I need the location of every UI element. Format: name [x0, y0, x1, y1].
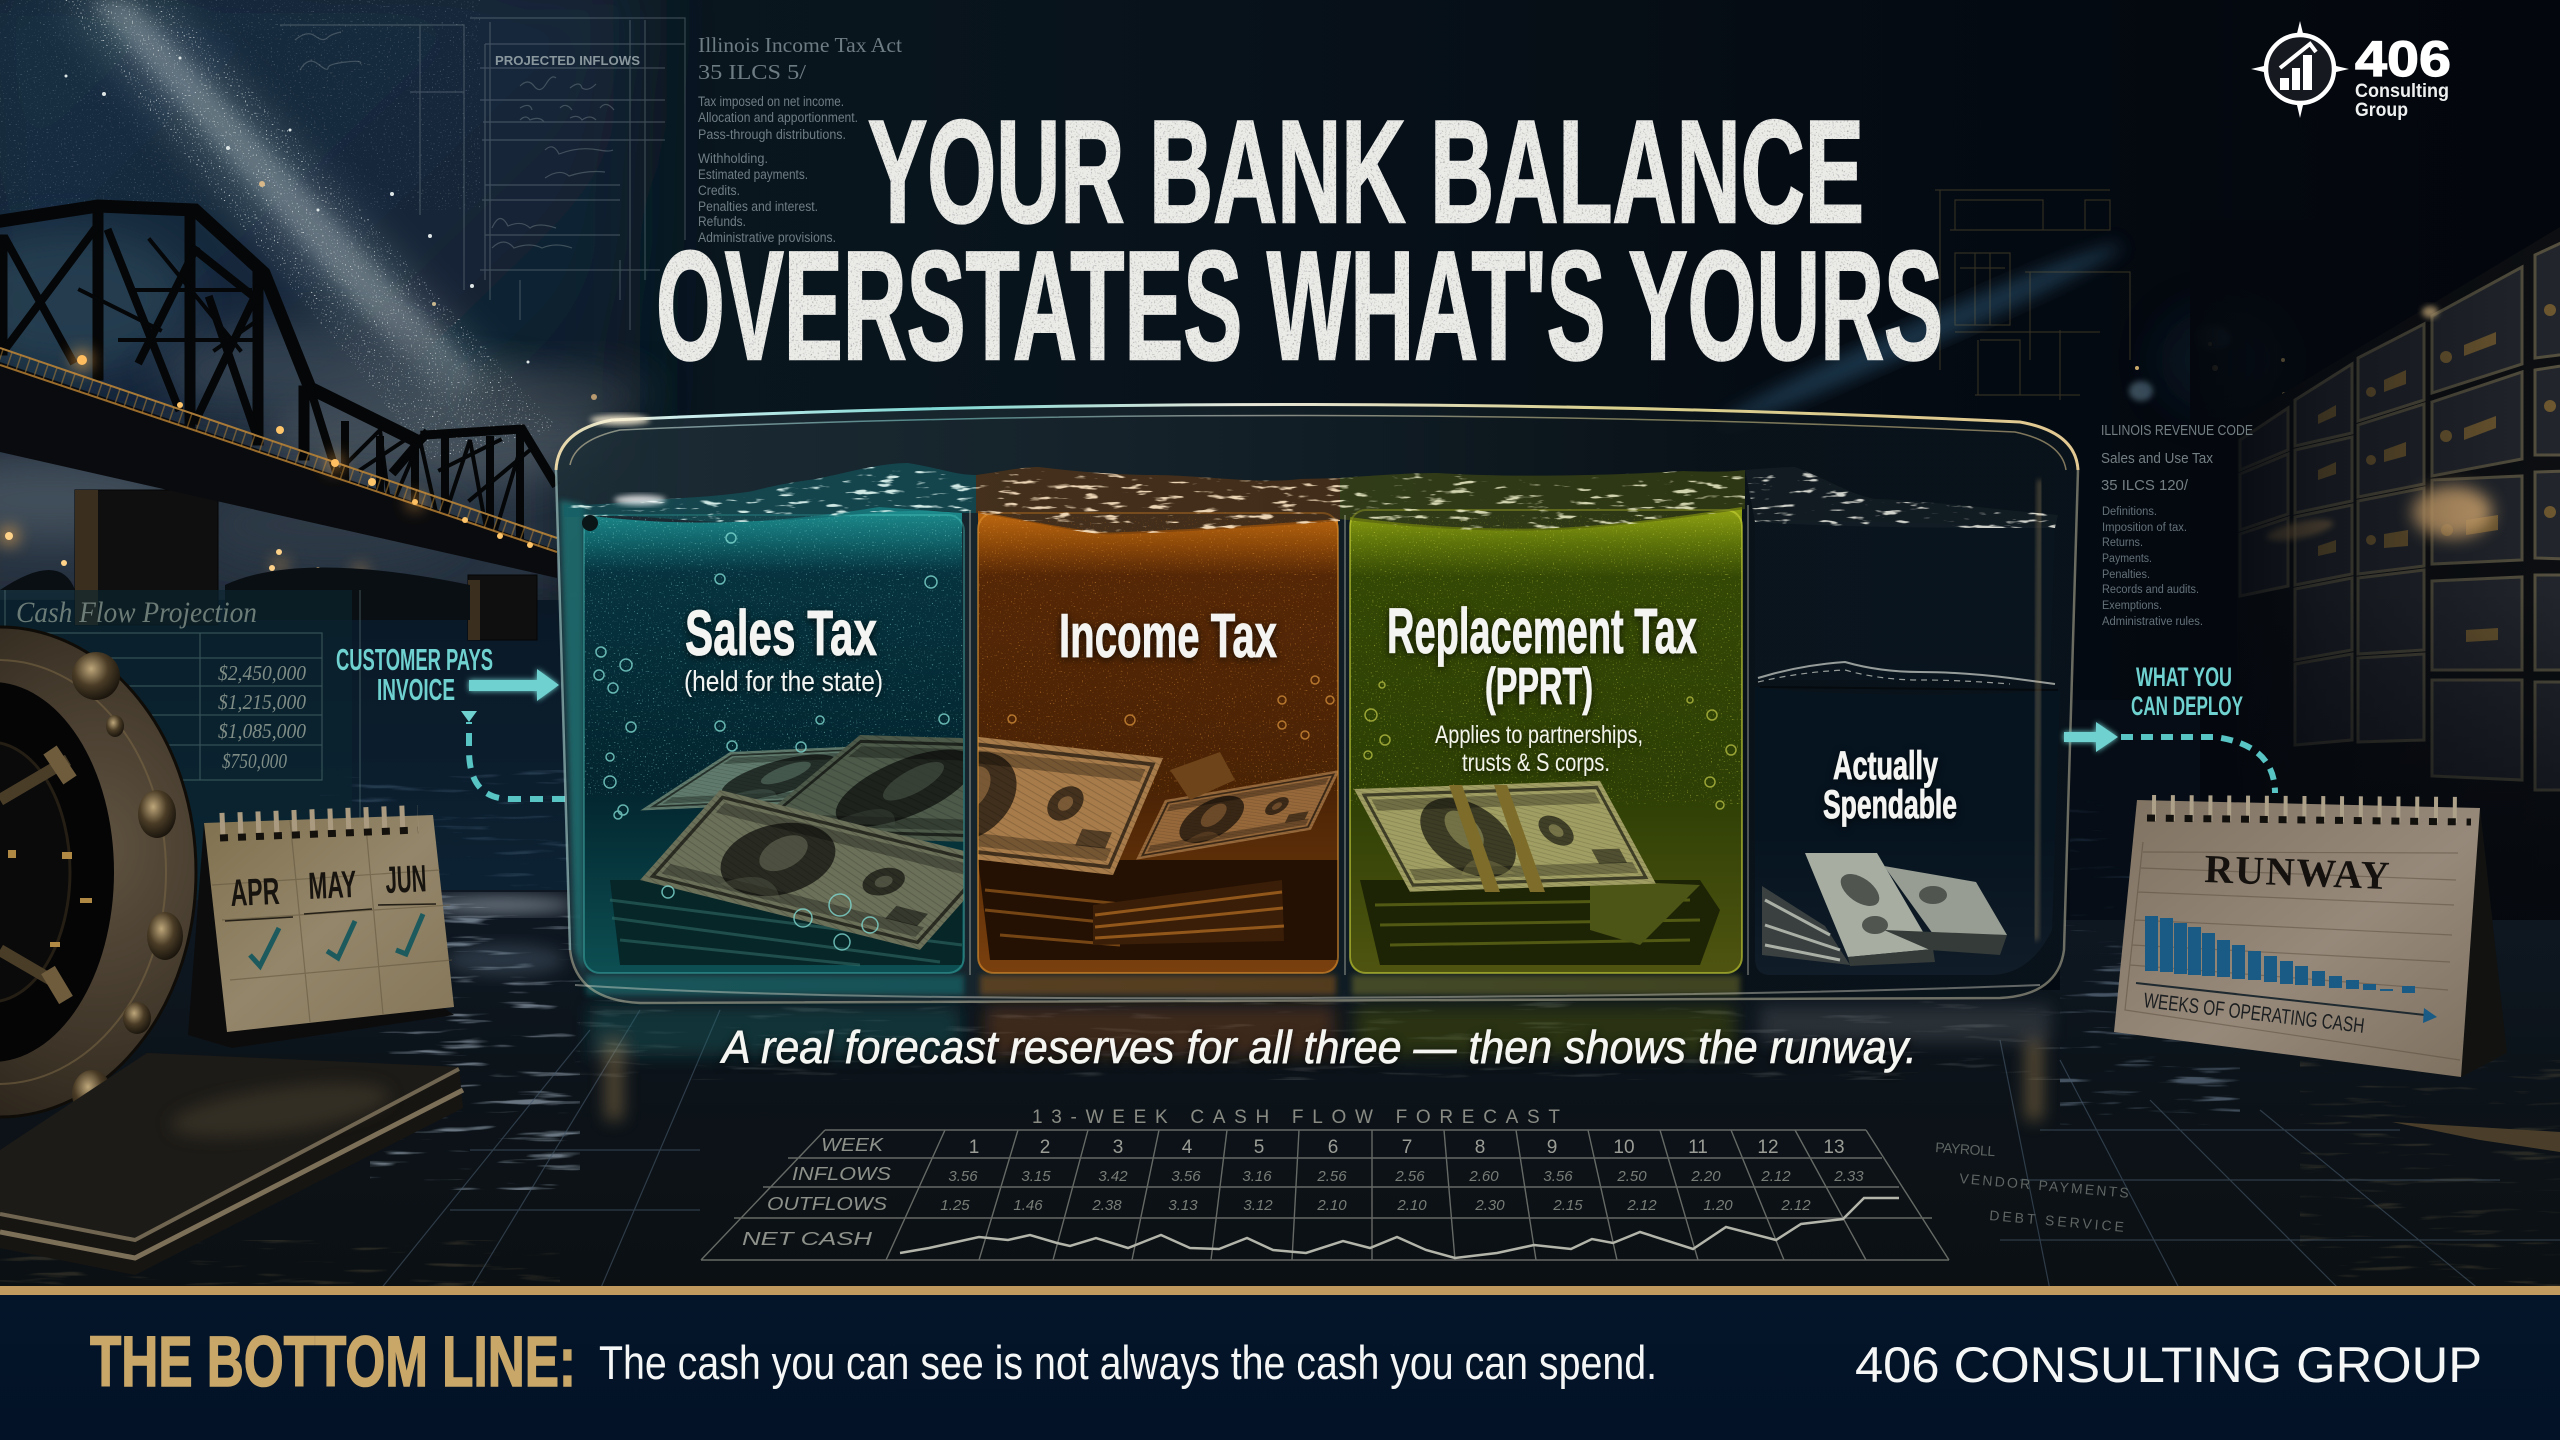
- label: sales tax: [684, 597, 883, 698]
- river water behind the desk: [0, 600, 2200, 930]
- callout: customer pays invoice: [336, 642, 565, 799]
- desk notes: payroll, vendor, debt: [1935, 1139, 2129, 1235]
- background document: Illinois Revenue Code: Sales and Use Tax: [2101, 451, 2214, 467]
- arrow: into tank: [469, 669, 559, 701]
- label: actually spendable: Actually: [1833, 744, 1939, 788]
- bar chart: weeks of cash: [2145, 916, 2415, 993]
- logo: 406 Consulting Group: 406: [2355, 31, 2451, 87]
- compartment: replacement tax water: [1350, 507, 1742, 973]
- cash: small silver stacks: [1762, 853, 2007, 966]
- forecast table etched on desk: 1.25: [940, 1197, 970, 1214]
- bottom banner: [0, 1286, 2560, 1440]
- label: replacement tax: (PPRT): [1485, 658, 1593, 716]
- forecast table etched on desk: 10: [1613, 1137, 1635, 1158]
- background document: Illinois Revenue Code: Payments.: [2102, 553, 2152, 565]
- logo: 406 Consulting Group: Consulting: [2355, 81, 2449, 102]
- forecast table etched on desk: 2.10: [1316, 1197, 1347, 1214]
- vault door: [0, 627, 196, 1118]
- starfield: [0, 0, 2286, 470]
- callout: what you can deploy: CAN DEPLOY: [2131, 691, 2243, 721]
- background document: Illinois Revenue Code: Exemptions.: [2102, 600, 2162, 612]
- bottom line label: THE BOTTOM LINE:: [90, 1323, 576, 1402]
- forecast table etched on desk: 3.15: [1021, 1168, 1051, 1185]
- cash: orange stacks: [978, 737, 1338, 960]
- label: actually spendable: [1823, 744, 1957, 827]
- calendar: runway: WEEKS OF OPERATING CASH: [2142, 989, 2366, 1038]
- background blueprint lines: [1935, 190, 2130, 400]
- cash flow projection sheet: $2,450,000: [218, 661, 306, 685]
- forecast table etched on desk: 3.56: [948, 1168, 978, 1185]
- label: replacement tax: Replacement Tax: [1387, 595, 1697, 667]
- cash: green stack: [1354, 781, 1720, 965]
- forecast table etched on desk: 2.50: [1616, 1168, 1647, 1185]
- forecast table etched on desk: 3.56: [1543, 1168, 1573, 1185]
- forecast table etched on desk: 1: [969, 1137, 979, 1158]
- cash flow projection sheet: $1,215,000: [218, 690, 306, 714]
- forecast table etched on desk: 8: [1475, 1137, 1485, 1158]
- forecast table etched on desk: 1.20: [1703, 1197, 1733, 1214]
- forecast table etched on desk: 3.56: [1171, 1168, 1201, 1185]
- callout: customer pays invoice: INVOICE: [377, 672, 455, 707]
- forecast table etched on desk: 12: [1757, 1137, 1779, 1158]
- forecast table etched on desk: 3: [1113, 1137, 1123, 1158]
- steel truss bridge with lights: [0, 206, 557, 640]
- glass tank with four compartments: [556, 404, 2078, 1003]
- forecast table etched on desk: 1.46: [1013, 1197, 1043, 1214]
- water surfaces and foam: [564, 460, 2065, 540]
- tagline: A real forecast reserves for all three — then shows the runway.: [719, 1021, 1917, 1073]
- calendar: apr may jun: APR: [230, 871, 280, 915]
- calendar: apr may jun: MAY: [308, 864, 357, 908]
- callout: customer pays invoice: CUSTOMER PAYS: [336, 642, 493, 677]
- background document: Illinois Revenue Code: Penalties.: [2102, 569, 2150, 581]
- forecast table etched on desk: 2.56: [1316, 1168, 1347, 1185]
- pen on desk: [2392, 1122, 2560, 1152]
- label: replacement tax: Applies to partnerships,: [1435, 721, 1643, 749]
- glass rim and walls: [556, 404, 2078, 1003]
- title: [656, 90, 1943, 392]
- forecast table etched on desk: 3.13: [1168, 1197, 1198, 1214]
- background document: Illinois Income Tax Act: Administrative provisions.: [698, 230, 836, 245]
- side and base glass tints: [560, 500, 1740, 995]
- label: replacement tax: trusts & S corps.: [1462, 749, 1610, 777]
- desk notes: payroll, vendor, debt: PAYROLL: [1935, 1139, 1996, 1159]
- second water surface in spendable section: [1758, 662, 2058, 690]
- forecast table etched on desk: 9: [1547, 1137, 1557, 1158]
- background document: Illinois Income Tax Act: Pass-through distributions.: [698, 127, 846, 142]
- background document: Illinois Revenue Code: 35 ILCS 120/: [2101, 478, 2189, 494]
- background document: Illinois Revenue Code: Imposition of tax.: [2102, 522, 2187, 534]
- label: replacement tax: [1387, 595, 1697, 777]
- cash flow projection sheet: $750,000: [222, 749, 287, 773]
- forecast table etched on desk: 13-WEEK CASH FLOW FORECAST: [1032, 1107, 1560, 1128]
- arrow: dashed to runway: [2121, 737, 2275, 793]
- title: YOUR BANK BALANCE: [868, 90, 1864, 253]
- bottom line message: The cash you can see is not always the cash you can spend.: [599, 1336, 1657, 1389]
- background document: Illinois Income Tax Act: Credits.: [698, 183, 740, 198]
- callout: what you can deploy: WHAT YOU: [2136, 662, 2232, 692]
- label: income tax: Income Tax: [1059, 602, 1277, 671]
- forecast table etched on desk: 2: [1040, 1137, 1050, 1158]
- desk notes: payroll, vendor, debt: VENDOR PAYMENTS: [1959, 1170, 2129, 1201]
- forecast table etched on desk: 2.60: [1468, 1168, 1499, 1185]
- label: sales tax: (held for the state): [684, 666, 883, 698]
- desk notes: payroll, vendor, debt: DEBT SERVICE: [1989, 1207, 2125, 1235]
- forecast table etched on desk: 3.42: [1098, 1168, 1128, 1185]
- forecast table etched on desk: 7: [1402, 1137, 1412, 1158]
- background document: Illinois Income Tax Act: Penalties and interest.: [698, 199, 818, 214]
- arrow: runway axis: [2136, 983, 2437, 1023]
- logo: 406 Consulting Group: [2251, 21, 2451, 121]
- bubbles: orange: [1008, 676, 1334, 739]
- forecast table etched on desk: OUTFLOWS: [767, 1194, 887, 1214]
- background document: Illinois Revenue Code: Records and audits.: [2102, 584, 2199, 596]
- background document: Illinois Revenue Code: Definitions.: [2102, 506, 2157, 518]
- callout: what you can deploy: [2064, 662, 2275, 793]
- forecast table etched on desk: 2.30: [1474, 1197, 1505, 1214]
- forecast table etched on desk: 11: [1688, 1137, 1708, 1158]
- logo: 406 Consulting Group: Group: [2355, 100, 2408, 121]
- forecast table etched on desk: 2.33: [1833, 1168, 1864, 1185]
- forecast table etched on desk: INFLOWS: [792, 1164, 891, 1184]
- forecast table etched on desk: NET CASH: [742, 1229, 873, 1249]
- calendar: apr may jun: JUN: [385, 858, 427, 902]
- forecast table etched on desk: 2.12: [1780, 1197, 1811, 1214]
- background document: Illinois Revenue Code: [2101, 423, 2253, 628]
- forecast table etched on desk: 2.20: [1690, 1168, 1721, 1185]
- company name: 406 CONSULTING GROUP: [1855, 1337, 2482, 1393]
- forecast table etched on desk: 2.10: [1396, 1197, 1427, 1214]
- calendar: runway: [2114, 800, 2507, 1077]
- bubbles: teal: [594, 533, 949, 950]
- glass interior above water: [556, 404, 2078, 1003]
- background document: Illinois Income Tax Act: PROJECTED INFLOWS: [495, 54, 640, 68]
- background document: Illinois Income Tax Act: Tax imposed on net income.: [698, 94, 844, 109]
- icon: compass chart mark: [2251, 21, 2349, 118]
- forecast table etched on desk: 2.12: [1626, 1197, 1657, 1214]
- background document: Illinois Income Tax Act: Illinois Income Tax Act: [698, 33, 902, 57]
- forecast table etched on desk: 6: [1328, 1137, 1338, 1158]
- background ledger: projected inflows sheet: [280, 18, 685, 330]
- compartment: actually spendable water: [1755, 519, 2060, 975]
- background document: Illinois Income Tax Act: Withholding.: [698, 151, 768, 166]
- calendar: apr may jun: [188, 815, 454, 1048]
- cash flow projection sheet: [0, 590, 360, 900]
- forecast table etched on desk: 13: [1823, 1137, 1845, 1158]
- forecast table etched on desk: WEEK: [821, 1135, 884, 1155]
- forecast table etched on desk: 4: [1182, 1137, 1193, 1158]
- label: actually spendable: Spendable: [1823, 783, 1957, 827]
- slab book on desk: [0, 1053, 463, 1275]
- arrow: dashed return loop: [461, 711, 565, 799]
- arrow: out of tank: [2064, 722, 2118, 752]
- background document: Illinois Income Tax Act: Estimated payments.: [698, 167, 808, 182]
- forecast table etched on desk: 2.56: [1394, 1168, 1425, 1185]
- reflections of tank on desk: [590, 1006, 2050, 1120]
- background document: Illinois Income Tax Act: Refunds.: [698, 214, 746, 229]
- bubbles: green: [1364, 682, 1736, 809]
- background document: Illinois Revenue Code: Returns.: [2102, 537, 2143, 549]
- label: sales tax: Sales Tax: [685, 597, 877, 669]
- cash flow projection sheet: Cash Flow Projection: [16, 596, 257, 629]
- background document: Illinois Revenue Code: ILLINOIS REVENUE CODE: [2101, 423, 2253, 439]
- cash: teal stacks: [610, 735, 964, 966]
- forecast table etched on desk: 2.15: [1552, 1197, 1583, 1214]
- background document: Illinois Revenue Code: Administrative rules.: [2102, 616, 2203, 628]
- forecast table etched on desk: [701, 1107, 1949, 1260]
- forecast table etched on desk: 3.16: [1242, 1168, 1272, 1185]
- calendar: runway: RUNWAY: [2204, 846, 2390, 898]
- background document: Illinois Income Tax Act: [495, 33, 902, 245]
- forecast table etched on desk: 5: [1254, 1137, 1264, 1158]
- forecast table etched on desk: 2.12: [1760, 1168, 1791, 1185]
- desk surface: [0, 890, 2560, 1290]
- background document: Illinois Income Tax Act: 35 ILCS 5/: [698, 60, 806, 84]
- background document: Illinois Income Tax Act: Allocation and apportionment.: [698, 110, 858, 125]
- compartment: income tax water: [977, 511, 1339, 974]
- forecast table etched on desk: 2.38: [1091, 1197, 1122, 1214]
- safe deposit lockers: [2190, 220, 2560, 960]
- cash flow projection sheet: $1,085,000: [218, 719, 306, 743]
- compartment: sales tax water: [583, 507, 965, 974]
- forecast table etched on desk: 3.12: [1243, 1197, 1273, 1214]
